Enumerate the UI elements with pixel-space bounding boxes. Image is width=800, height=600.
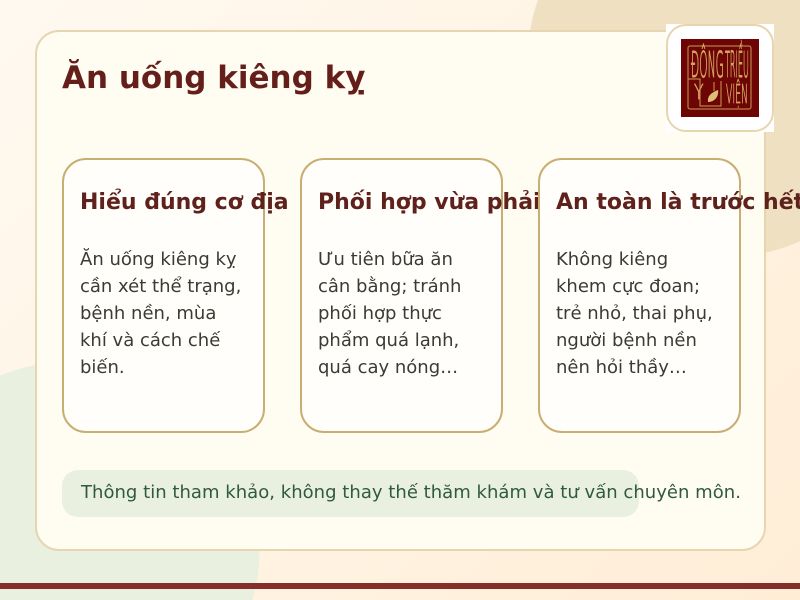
card text: phẩm quá lạnh, — [318, 330, 459, 351]
card text — [80, 248, 241, 378]
card text: Không kiêng — [556, 249, 668, 270]
card heading: Hiểu đúng cơ địa — [80, 190, 289, 215]
card text: bệnh nền, mùa — [80, 303, 216, 324]
note text: Thông tin tham khảo, không thay thế thăm khám và tư vấn chuyên môn. — [81, 482, 741, 503]
card text: cân bằng; tránh — [318, 276, 461, 297]
logo mark: Đông Triều Y Viện seal — [681, 39, 759, 117]
card: An toàn là trước hết — [538, 158, 741, 433]
card heading: An toàn là trước hết — [556, 190, 800, 215]
card text: nên hỏi thầy… — [556, 357, 687, 378]
card text — [318, 249, 461, 378]
card text: khí và cách chế — [80, 330, 220, 351]
card text: trẻ nhỏ, thai phụ, — [556, 303, 713, 324]
card text — [556, 249, 713, 378]
logo mark: Đông Triều Y Viện seal: TRIỀU — [725, 39, 749, 87]
logo — [666, 24, 774, 132]
card text: Ăn uống kiêng kỵ — [80, 249, 237, 270]
main panel — [35, 30, 766, 551]
logo frame — [666, 24, 774, 132]
logo mark: Đông Triều Y Viện seal: Y — [694, 81, 704, 105]
card text: quá cay nóng… — [318, 357, 458, 378]
note pill — [62, 470, 639, 517]
card text: khem cực đoan; — [556, 276, 700, 297]
logo mark: Đông Triều Y Viện seal: ĐÔNG — [691, 43, 724, 86]
card: Hiểu đúng cơ địa — [62, 158, 265, 433]
card: Phối hợp vừa phải — [300, 158, 503, 433]
background circle: bottom left — [0, 361, 260, 600]
logo mark: Đông Triều Y Viện seal: VIỆN — [726, 79, 748, 110]
card text: biến. — [80, 357, 125, 378]
card text: phối hợp thực — [318, 303, 442, 324]
title: Ăn uống kiêng kỵ — [62, 60, 365, 96]
card text: cần xét thể trạng, — [80, 276, 241, 297]
card text: Ưu tiên bữa ăn — [318, 249, 453, 270]
card heading: Phối hợp vừa phải — [318, 190, 541, 215]
card text: người bệnh nền — [556, 330, 697, 351]
background circle: top right — [527, 0, 800, 258]
bottom bar — [0, 583, 800, 589]
